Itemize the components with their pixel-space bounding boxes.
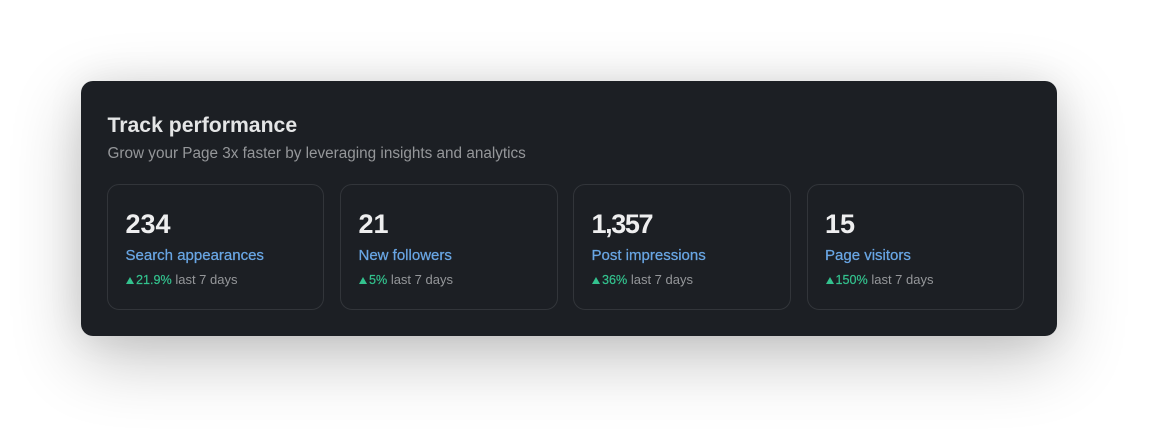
- icon: up triangle: [126, 277, 134, 284]
- change: 150% last 7 days: [836, 272, 933, 287]
- panel: track performance: [81, 81, 1057, 336]
- card: page visitors: [806, 184, 1024, 310]
- value: 15: [825, 209, 855, 239]
- card: new followers: [340, 184, 558, 310]
- label: New followers: [358, 247, 452, 264]
- card: search appearances: [107, 184, 324, 310]
- value: 1,357: [592, 209, 652, 239]
- icon: up triangle: [359, 277, 367, 284]
- label: Page visitors: [825, 247, 911, 264]
- change: 21.9% last 7 days: [136, 272, 237, 287]
- value: 234: [126, 209, 171, 239]
- icon: up triangle: [826, 277, 834, 284]
- icon: up triangle: [592, 277, 600, 284]
- label: Post impressions: [592, 247, 706, 264]
- card: post impressions: [573, 184, 790, 310]
- change: 36% last 7 days: [602, 272, 693, 287]
- heading: Track performance: [108, 114, 297, 137]
- value: 21: [358, 209, 389, 239]
- label: Search appearances: [126, 247, 264, 264]
- change: 5% last 7 days: [369, 272, 453, 287]
- subheading: Grow your Page 3x faster by leveraging insights and analytics: [108, 145, 526, 162]
